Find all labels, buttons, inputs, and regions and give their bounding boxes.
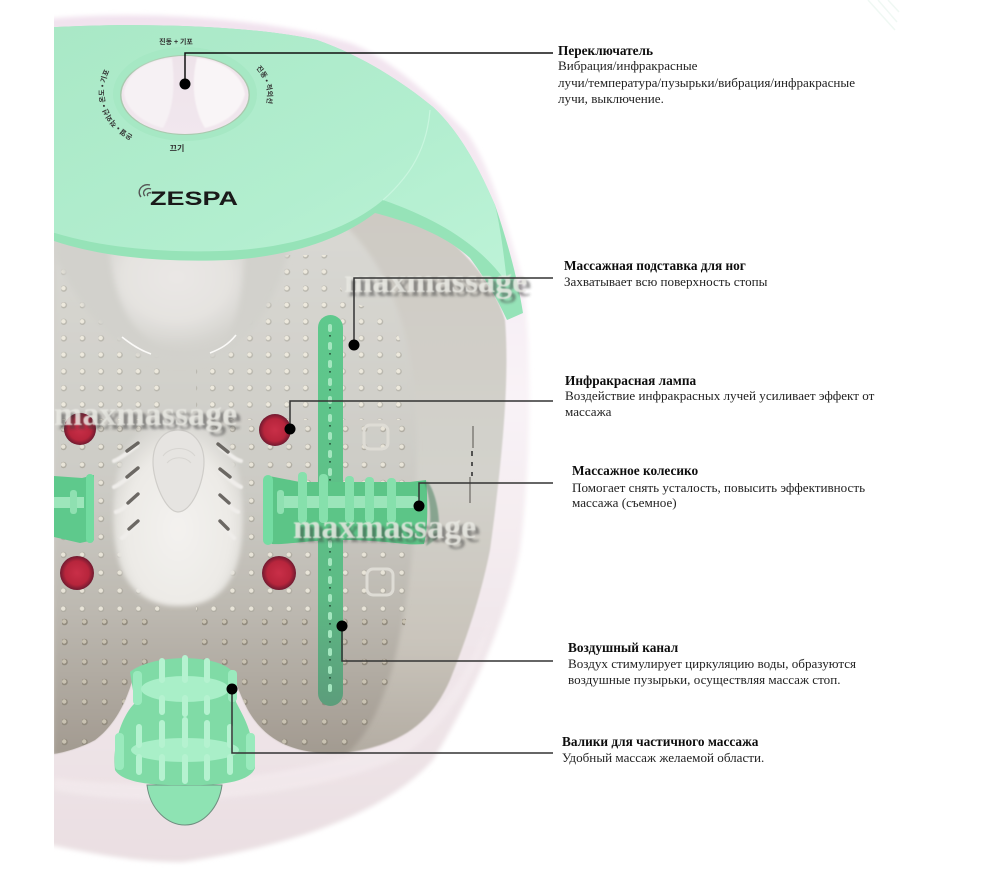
- watermark: centre: maxmassage: [297, 513, 480, 550]
- label: selector: Переключатель: [558, 43, 653, 58]
- funnel shoulder: [61, 255, 290, 358]
- label: foot platform: [564, 258, 768, 289]
- water level mark: [470, 426, 473, 503]
- dial knob: [120, 55, 250, 135]
- brand logo: ZESPA: [150, 189, 238, 210]
- watermark: top: maxmassage: [344, 263, 527, 300]
- air channel: [318, 315, 343, 706]
- watermark: top: maxmassage: [348, 267, 531, 304]
- label: selector: лучи/температура/пузырьки/вибрация/инфракрасные: [558, 75, 855, 90]
- massage dots on floor: [54, 243, 414, 752]
- label: infrared lamp: Воздействие инфракрасных лучей усиливает эффект от: [565, 388, 875, 403]
- dial labels: 진동 • 적외선: [256, 65, 274, 104]
- side slots: [127, 443, 230, 529]
- dial labels: 진동 + 기포: [159, 37, 193, 46]
- massage hump: [113, 414, 243, 606]
- infrared lamps: [60, 413, 296, 590]
- label: massage wheel: массажа (съемное): [572, 495, 677, 510]
- basin floor: [54, 225, 417, 755]
- disc seam: [383, 110, 430, 200]
- watermark: left: maxmassage: [58, 400, 241, 437]
- label: selector: [558, 43, 855, 106]
- callout line: infrared lamp: [284, 401, 553, 434]
- brand logo: [138, 184, 238, 205]
- front massage tab: [147, 785, 222, 825]
- label: air channel: [568, 640, 856, 687]
- label: foot platform: Захватывает всю поверхность стопы: [564, 274, 768, 289]
- callout line: foot platform: [348, 278, 553, 350]
- side fins: [112, 445, 244, 514]
- lid: [54, 25, 523, 320]
- callout line: air channel: [336, 620, 553, 661]
- label: selector: лучи, выключение.: [558, 91, 664, 106]
- label: massage wheel: Помогает снять усталость, повысить эффективность: [572, 480, 865, 495]
- label: infrared lamp: массажа: [565, 404, 612, 419]
- callout line: selector: [180, 53, 553, 90]
- label: air channel: Воздух стимулирует циркуляцию воды, образуются: [568, 656, 856, 671]
- dial recess: [154, 82, 257, 141]
- callout line: massage wheel: [414, 483, 553, 512]
- egg outline: [153, 430, 204, 512]
- label: massage wheel: [572, 463, 865, 510]
- faint square markers: [364, 425, 393, 595]
- callout line: partial rollers: [226, 684, 553, 753]
- label: partial rollers: Удобный массаж желаемой области.: [562, 750, 764, 765]
- foot spa photo illustration: [54, 14, 532, 864]
- dial labels: [98, 38, 274, 152]
- left massage roller: [54, 474, 94, 543]
- watermark: centre: maxmassage: [293, 509, 476, 546]
- label: air channel: Воздушный канал: [568, 640, 679, 655]
- basin interior wall: [54, 195, 506, 754]
- watermark: left: maxmassage: [54, 396, 237, 433]
- label: air channel: воздушные пузырьки, осуществляя массаж стоп.: [568, 672, 841, 687]
- dial labels: 끄기: [170, 143, 184, 153]
- label: partial rollers: [562, 734, 764, 765]
- label: infrared lamp: Инфракрасная лампа: [565, 373, 697, 388]
- lid rim and wing: [40, 25, 523, 320]
- label: foot platform: Массажная подставка для ног: [564, 258, 746, 273]
- dial labels: 온열 • 적외선 • 온도 • 기포: [98, 69, 132, 140]
- body: pink outer shell: [40, 15, 529, 862]
- label: massage wheel: Массажное колесико: [572, 463, 699, 478]
- right massage roller: [263, 472, 439, 546]
- lid top surface: [40, 25, 507, 283]
- label: infrared lamp: [565, 373, 875, 419]
- funnel column under lid: [112, 255, 242, 336]
- label: partial rollers: Валики для частичного массажа: [562, 734, 759, 749]
- front massage rollers: [114, 658, 255, 785]
- label: selector: Вибрация/инфракрасные: [558, 58, 698, 73]
